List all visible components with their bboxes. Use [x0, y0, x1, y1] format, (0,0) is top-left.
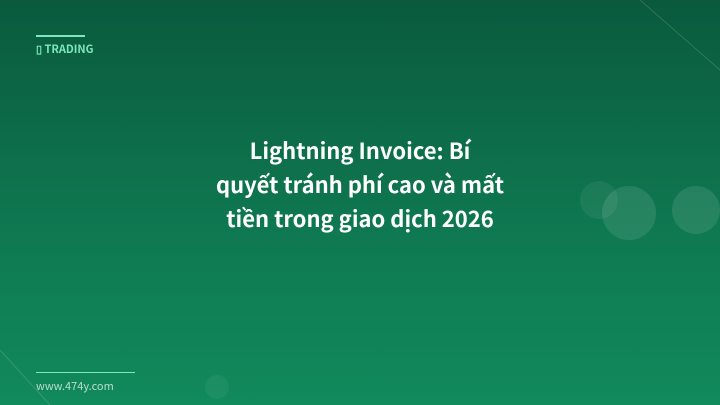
title: Lightning Invoice: Bí — [250, 134, 470, 166]
category label: ▯ TRADING — [36, 41, 94, 57]
decorative circles — [580, 181, 720, 240]
small circle bottom — [205, 375, 229, 399]
title: tiền trong giao dịch 2026 — [226, 202, 494, 234]
title — [216, 134, 504, 234]
website: www.474y.com — [36, 378, 114, 394]
title: quyết tránh phí cao và mất — [216, 168, 504, 200]
accent line bottom — [36, 372, 135, 373]
accent line top — [36, 35, 85, 37]
